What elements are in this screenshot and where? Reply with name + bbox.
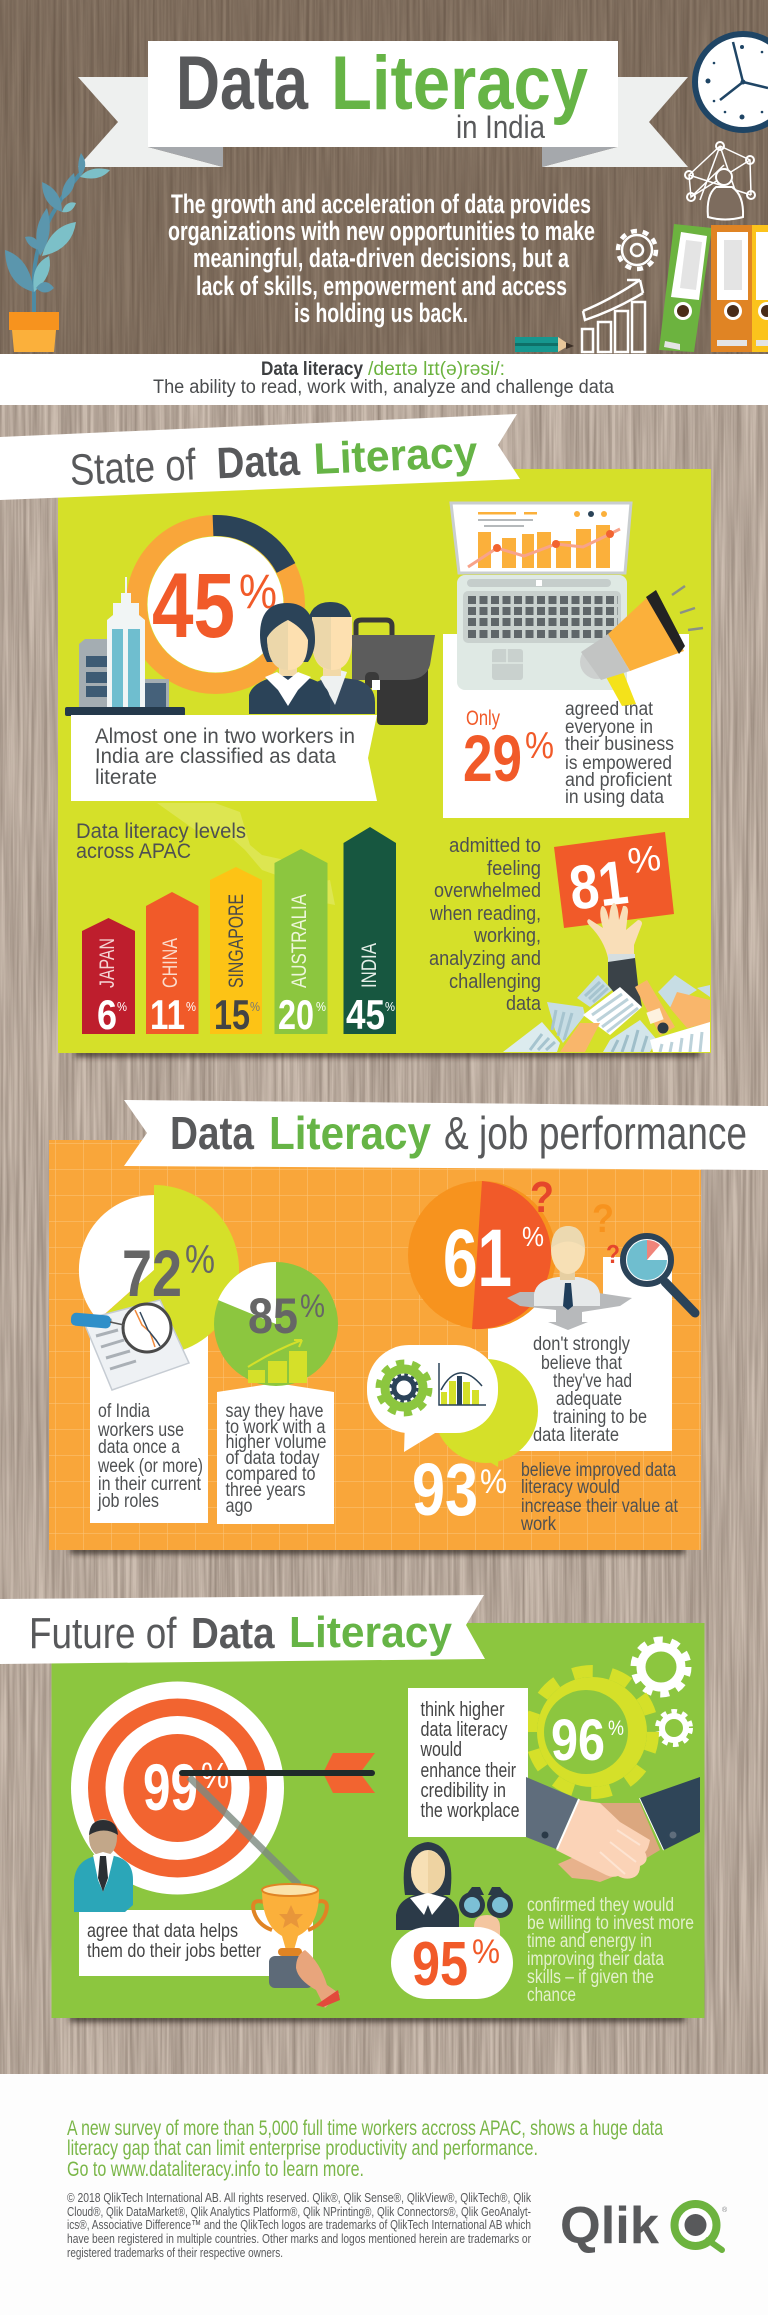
text box: agree data helps: them do their jobs better [87,1941,262,1962]
callout: 29 percent: their business [565,734,674,755]
text: 93 percent: % [480,1463,507,1501]
text box: 85 percent [217,1383,334,1524]
heading ribbon: state of data literacy [0,414,520,500]
chart: donut 45 percent: % [239,566,277,619]
chart: gear 96 percent [531,1671,653,1793]
text: data literacy levels across APAC: across APAC [76,840,191,863]
icon: raised hand and pile of papers [503,903,710,1052]
callout: 29 percent: in using data [565,787,664,808]
text: confirmed willing to invest: confirmed they would [527,1895,674,1916]
bar: Australia [274,849,328,1038]
footer legal text: Cloud®, Qlik DataMarket®, Qlik Analytics Platform®, Qlik NPrinting®, Qlik Connectors®, Qlik GeoAnalyt- [67,2204,531,2219]
chart: target 99 percent: 99 [143,1750,198,1824]
text box: 85 percent: say they have [226,1401,324,1422]
definition band [0,354,768,405]
text: data literacy levels across APAC: Data literacy levels [76,820,246,843]
text box: 72 percent: job roles [97,1491,159,1512]
icon: small white gear [658,1712,690,1744]
background: dark wood header [0,0,768,354]
text: admitted to feeling overwhelmed: feeling [487,858,541,880]
intro paragraph: organizations with new opportunities to make [168,216,595,246]
heading ribbon: future of data literacy: Literacy [289,1608,453,1657]
icon: man in teal suit [74,1819,133,1912]
subtitle: in India: in India [456,109,545,145]
text box: 72 percent: of India [98,1401,150,1422]
definition term: Data literacy [261,359,363,380]
header ribbon and title [78,41,688,167]
callout: 29 percent: Only [466,707,500,730]
text: confirmed willing to invest: skills – if given the [527,1967,654,1988]
text box: 85 percent: compared to [226,1464,316,1485]
text box: 96 percent: would [420,1739,462,1761]
text: admitted to feeling overwhelmed: working, [473,925,541,947]
bar: India: INDIA [358,943,381,988]
heading ribbon: data literacy and job performance: Data [170,1107,254,1159]
bar: China: 11 [150,991,185,1038]
icon: arrow in target [182,1753,375,1885]
heading ribbon: state of data literacy: Literacy [312,428,479,484]
intro paragraph: lack of skills, empowerment and access [196,271,567,301]
background: light wood body [0,405,768,2075]
callout: 29 percent: everyone in [565,717,653,738]
callout: 29 percent [443,634,689,818]
footer survey statement: literacy gap that can limit enterprise productivity and performance. [67,2137,538,2160]
text: 93 percent [412,1448,679,1535]
callout: one in two workers: Almost one in two workers in [95,725,355,748]
text box: 96 percent [408,1688,528,1837]
callout: 29 percent: and proficient [565,770,673,791]
text box: 85 percent: three years [226,1480,306,1501]
intro paragraph: is holding us back. [294,298,468,328]
text box: 85 percent: higher volume [226,1432,326,1453]
chart: pie 61 percent [408,1181,556,1329]
footer survey statement [67,2117,663,2181]
bar: Australia: % [316,999,326,1014]
bar: India: % [385,999,395,1014]
text: confirmed willing to invest: improving their data [527,1949,664,1970]
icon: megaphone [580,586,703,706]
title: Data: Data [176,41,309,126]
bar: Japan [82,918,135,1038]
icon: thinking man with question marks: ? [606,1239,620,1269]
bar: China: CHINA [159,938,182,988]
icon: plant in pot [5,153,110,352]
callout: 95 percent: % [472,1933,500,1971]
text: confirmed willing to invest: be willing to invest more [527,1913,694,1934]
text box: agree data helps: agree that data helps [87,1921,238,1942]
panel: data literacy and job performance [49,1140,701,1554]
icon: large white gear [635,1641,687,1693]
chart: target 99 percent: % [201,1755,229,1796]
text: confirmed willing to invest: chance [527,1985,576,2006]
callout: one in two workers: literate [95,766,157,789]
chart: donut 45 percent [136,525,294,684]
definition text: The ability to read, work with, analyze and challenge data [153,377,614,398]
text: admitted to feeling overwhelmed: analyzing and [429,948,541,970]
text: data literacy levels across APAC [76,820,246,863]
text box: 72 percent: data once a [98,1437,180,1458]
callout: one in two workers [71,715,377,801]
footer legal text: have been registered in multiple countries. Other marks and logos mentioned herein are trademarks or [67,2231,532,2246]
icon: thinking man with question marks: ? [592,1197,614,1241]
icon: city buildings [65,577,185,716]
icon: woman with binoculars [396,1842,513,1935]
heading ribbon: future of data literacy: Future of [29,1609,177,1658]
callout: 81 percent sign: % [625,837,663,882]
bar: Japan: JAPAN [96,938,119,988]
text: 93 percent: literacy would [521,1477,620,1498]
chart: pie 72 percent: % [185,1238,215,1282]
icon: magnifying glass [623,1236,695,1313]
icon: laptop with chart [451,503,631,690]
callout: 29 percent: % [525,725,554,767]
icon: growth chart and arrow [582,280,645,352]
callout: 95 percent [391,1927,513,1999]
text box: 61 percent [488,1257,672,1451]
bar: India [344,827,396,1038]
text: confirmed willing to invest: time and energy in [527,1931,652,1952]
text box: 61 percent: they've had [553,1371,632,1392]
bar: Singapore: % [250,999,260,1014]
background: white footer [0,2074,768,2315]
callout: 29 percent: agreed that [565,699,654,720]
chart: pie 61 percent: 61 [443,1213,512,1304]
bar: Japan: 6 [97,991,117,1038]
chart: pie 72 percent [79,1185,239,1355]
heading ribbon: state of data literacy: Data [216,436,301,488]
footer legal text: © 2018 QlikTech International AB. All rights reserved. Qlik®, Qlik Sense®, QlikView®, QlikTech®, Qlik [67,2190,531,2205]
text: 93 percent: 93 [412,1448,478,1531]
title: Literacy: Literacy [331,41,588,126]
chart: gear 96 percent: 96 [551,1708,605,1773]
panel: future of data literacy [52,1623,704,2022]
chart: pie 72 percent: 72 [122,1236,182,1310]
text: admitted to feeling overwhelmed: when reading, [429,903,541,925]
icon: briefcase [352,620,435,725]
text box: 96 percent: data literacy [420,1719,508,1741]
text: admitted to feeling overwhelmed [429,835,542,1015]
text: admitted to feeling overwhelmed: admitted to [449,835,541,857]
chart: donut 45 percent: 45 [152,555,235,657]
text: 93 percent: work [520,1514,556,1535]
bar: Singapore [210,867,262,1038]
chart: pie 85 percent: 85 [248,1288,298,1344]
text box: 61 percent: don't strongly [533,1334,630,1355]
text box: 61 percent: adequate [556,1389,622,1410]
heading ribbon: state of data literacy: State of [69,440,197,495]
chart: gear 96 percent: % [608,1717,624,1740]
heading ribbon: future of data literacy [0,1595,485,1664]
footer legal text: ics®, Associative Difference™ and the QlikTech logos are trademarks of QlikTech International AB which [67,2217,531,2232]
icon: handshake [526,1777,700,1882]
text: admitted to feeling overwhelmed: overwhelmed [434,880,541,902]
text box: 96 percent: credibility in [420,1780,506,1802]
intro paragraph [168,189,595,328]
text box: 61 percent: data literate [533,1425,619,1446]
text: admitted to feeling overwhelmed: challenging [449,971,541,993]
callout: 81 percent sign [554,832,674,928]
bar: Australia: AUSTRALIA [288,894,311,988]
callout: 29 percent: 29 [463,721,522,795]
heading ribbon: future of data literacy: Data [191,1609,275,1658]
footer legal text: registered trademarks of their respective owners. [67,2245,283,2260]
text box: 72 percent: week (or more) [97,1456,203,1477]
text: 93 percent: believe improved data [521,1460,676,1481]
heading ribbon: data literacy and job performance [124,1100,768,1170]
bar: Australia: 20 [278,991,314,1038]
intro paragraph: The growth and acceleration of data provides [171,189,591,219]
text box: 96 percent: the workplace [420,1800,520,1822]
icon: thinking man with question marks: ? [530,1173,554,1222]
text box: 85 percent: of data today [226,1448,320,1469]
callout: one in two workers: India are classified as data [95,745,336,768]
text box: 61 percent: believe that [541,1353,623,1374]
bar: India: 45 [346,991,385,1038]
text box: 85 percent: ago [226,1496,252,1517]
text box: 72 percent: workers use [97,1420,184,1441]
icon: pencil [515,337,574,352]
icon: trophy in hand [253,1884,340,2008]
icon: gear outline [618,231,656,269]
bar chart: APAC literacy levels [82,827,396,1038]
chart: pie 61 percent: % [522,1221,544,1252]
bar: Singapore: SINGAPORE [225,894,248,988]
logo: Qlik: Qlik [560,2197,659,2255]
icon: thinking man with question marks [507,1173,632,1330]
panel: state of data literacy [58,469,711,1057]
text box: 72 percent [90,1330,208,1523]
logo: Qlik: ® [722,2206,728,2214]
icon: business people [249,602,375,714]
bar: China: % [186,999,196,1014]
bar: Singapore: 15 [214,991,250,1038]
text box: agree data helps [79,1910,313,1976]
chart: target 99 percent [71,1682,284,1894]
chart: pie 85 percent [214,1262,338,1386]
footer legal text [67,2190,532,2260]
text: confirmed willing to invest [527,1895,694,2006]
icon: clock [695,34,768,130]
callout: 29 percent: is empowered [565,753,672,774]
icon: network person [685,142,755,220]
intro paragraph: meaningful, data-driven decisions, but a [193,243,570,273]
bar: Japan: % [117,999,127,1014]
icon: speech bubbles with gear and chart [367,1345,538,1467]
text: admitted to feeling overwhelmed: data [506,993,542,1015]
callout: 81 percent sign: 81 [566,848,632,924]
text box: 96 percent: think higher [420,1699,505,1721]
text box: 61 percent: training to be [553,1407,647,1428]
map decoration [157,803,335,905]
chart: pie 85 percent: % [300,1288,325,1324]
callout: 95 percent: 95 [412,1930,468,1999]
icon: binders [659,224,768,352]
heading ribbon: data literacy and job performance: Literacy [269,1107,431,1159]
text box: 85 percent: to work with a [226,1417,326,1438]
text box: 72 percent: in their current [98,1474,202,1495]
pronunciation: /deɪtə lɪt(ə)rəsi/: [368,359,505,380]
icon: report with magnifier [70,1300,189,1390]
text box: 96 percent: enhance their [420,1760,516,1782]
bar: China [146,892,198,1038]
footer survey statement: Go to www.dataliteracy.info to learn more. [67,2158,364,2181]
text: 93 percent: increase their value at [521,1496,679,1517]
logo: Qlik [560,2197,728,2255]
